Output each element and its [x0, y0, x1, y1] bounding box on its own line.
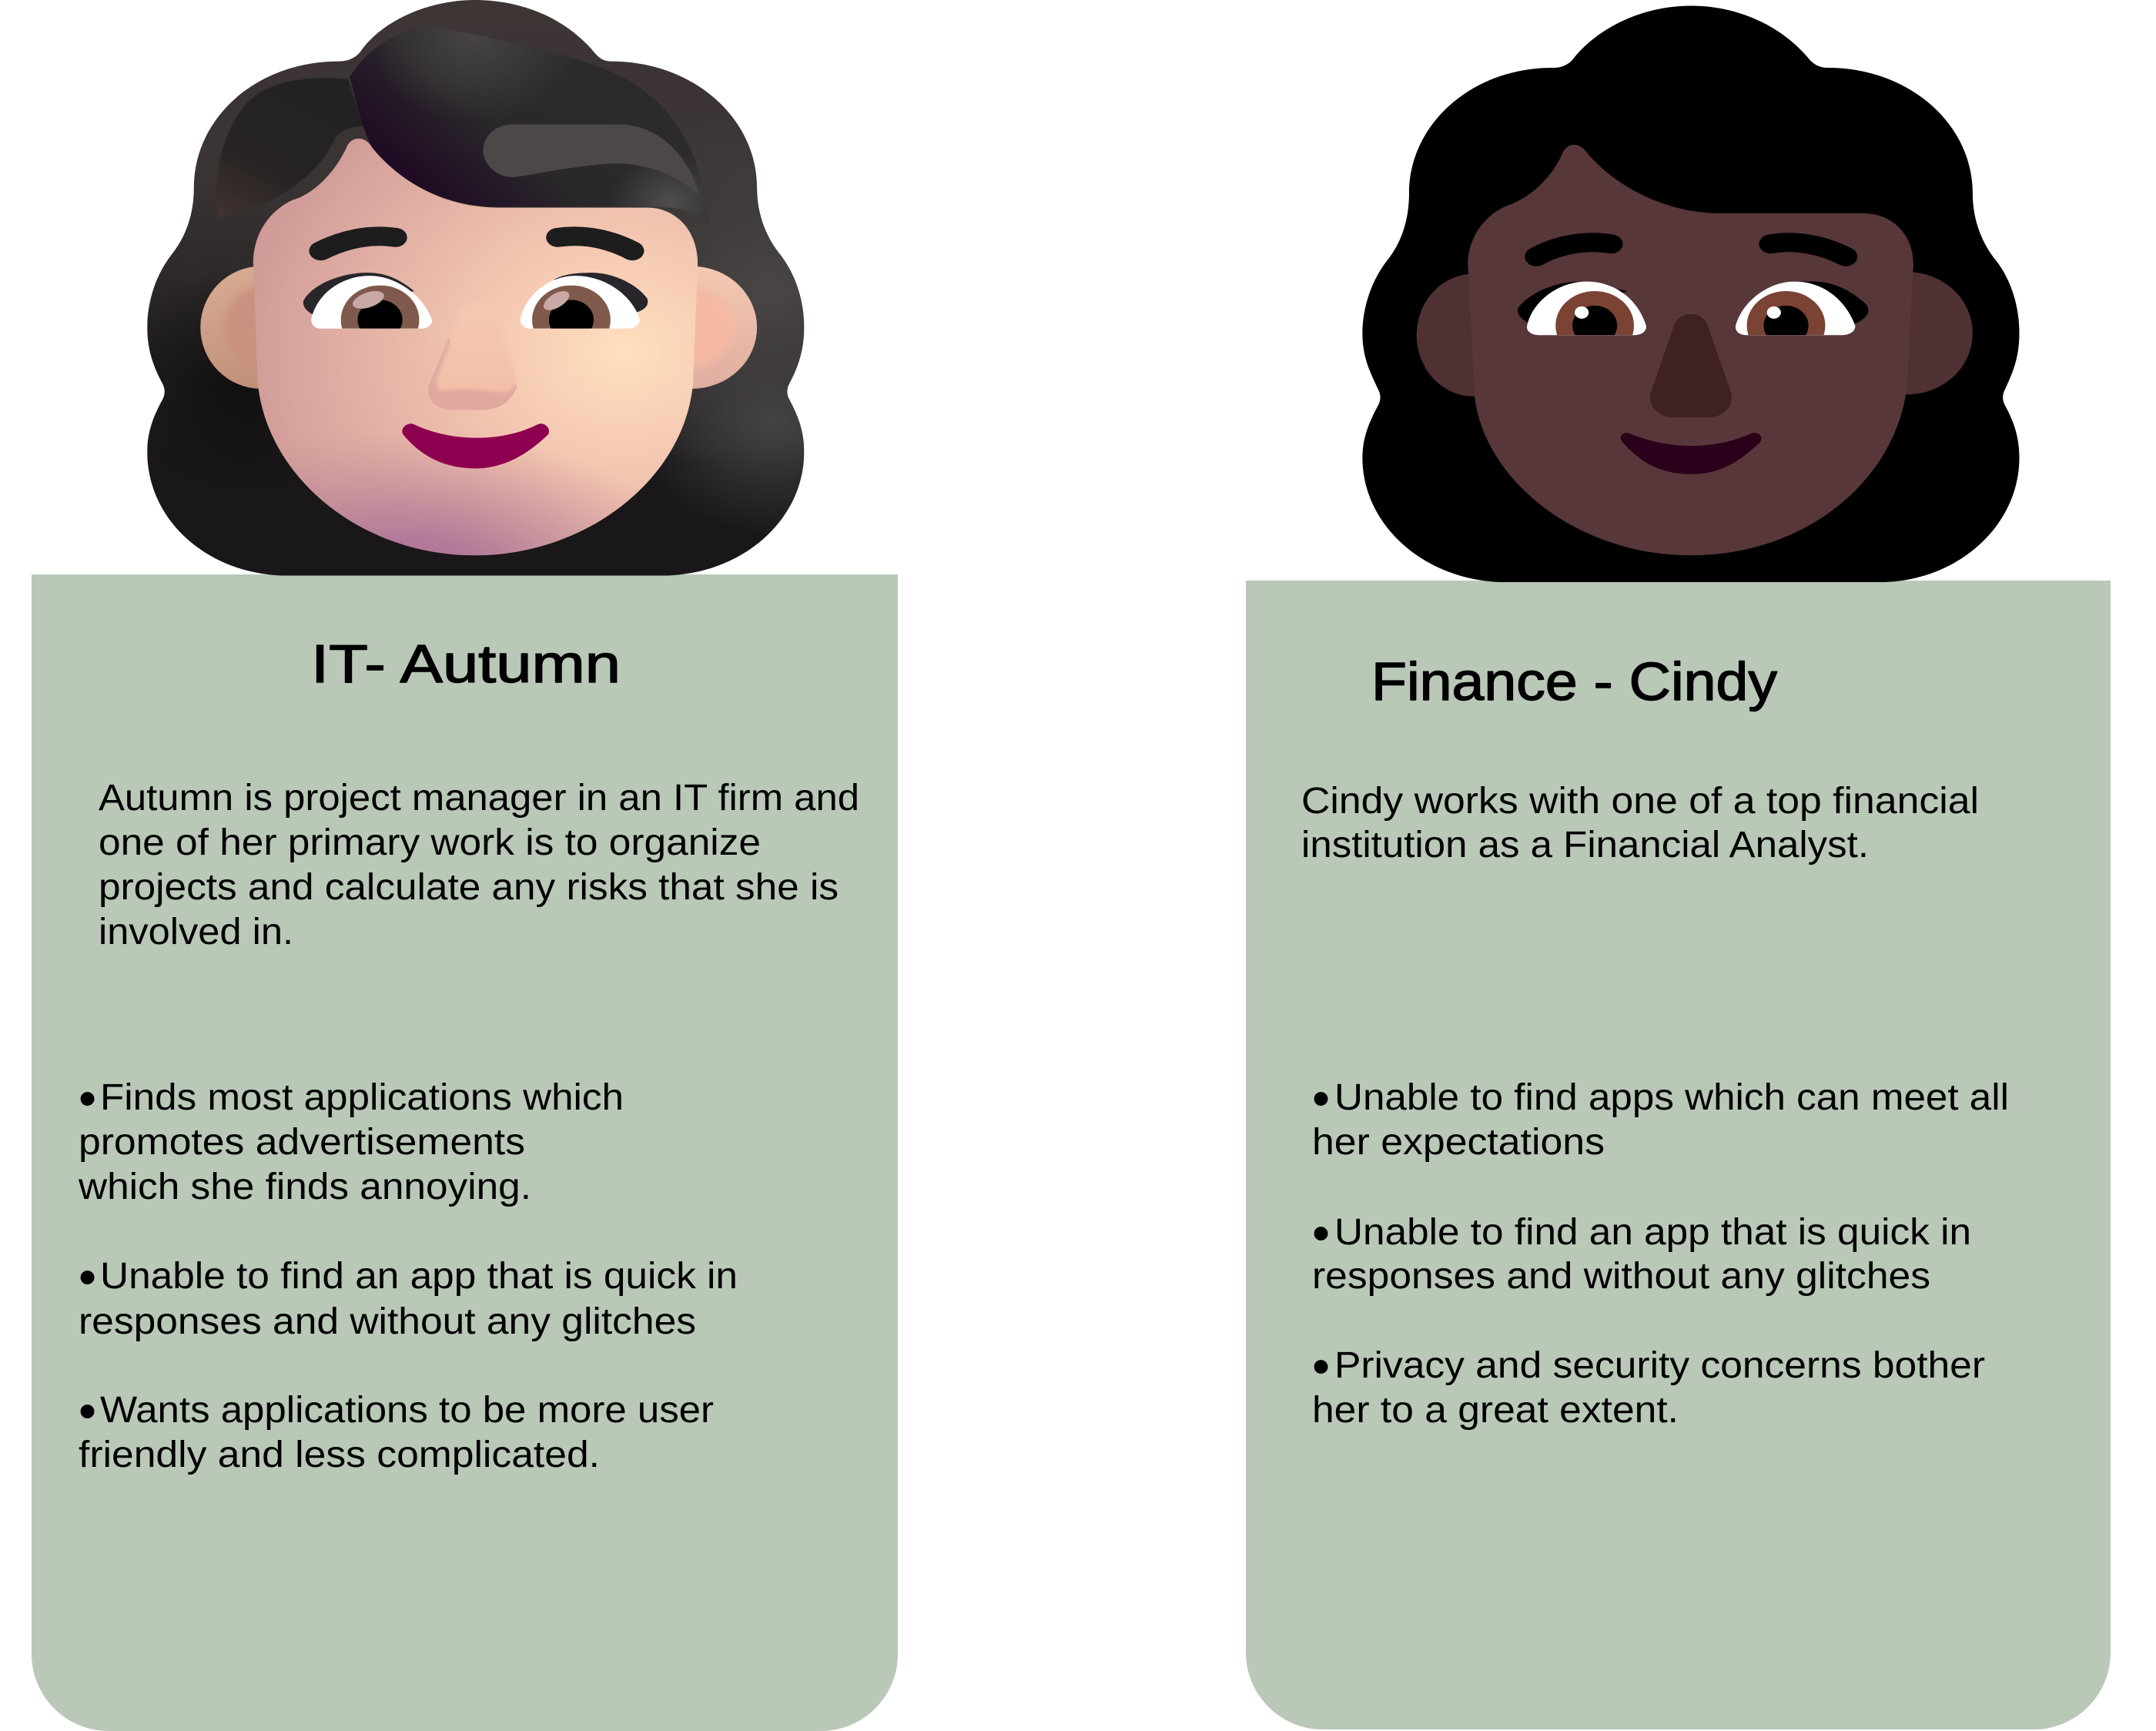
text: Autumn pain points: Unable to find an app that is quick in — [100, 1256, 738, 1297]
text: Autumn pain points: • — [79, 1248, 96, 1305]
eyebrows — [1536, 243, 1846, 256]
text: Cindy pain points: her to a great extent. — [1312, 1390, 1679, 1431]
heading: IT- Autumn: IT- Autumn — [311, 634, 621, 694]
ears — [1417, 272, 1973, 397]
text: Autumn pain points — [78, 1070, 738, 1475]
nose — [1650, 314, 1732, 417]
hair front lock — [350, 29, 708, 225]
heading: Finance - Cindy: Finance - Cindy — [1371, 651, 1777, 711]
ears — [200, 266, 757, 389]
text: Autumn pain points: which she finds annoying. — [78, 1167, 531, 1207]
mouth — [1621, 433, 1761, 474]
left eye — [303, 273, 432, 329]
text: Cindy pain points: Unable to find apps which can meet all — [1334, 1077, 2009, 1118]
hair — [1362, 5, 2019, 582]
text: Cindy pain points: Unable to find an app that is quick in — [1334, 1212, 1971, 1253]
text: Cindy pain points: • — [1312, 1338, 1330, 1395]
mouth — [402, 424, 549, 468]
text: Cindy description — [1301, 781, 1979, 866]
text: Cindy pain points: responses and without any glitches — [1312, 1256, 1930, 1297]
text: Cindy pain points — [1312, 1070, 2009, 1431]
right eye — [1736, 282, 1868, 336]
right eye — [521, 273, 648, 329]
left eye — [1517, 282, 1646, 336]
text: Autumn description: one of her primary work is to organize — [99, 822, 761, 863]
text: Autumn pain points: • — [79, 1382, 96, 1439]
text: Autumn pain points: Finds most applications which — [100, 1077, 624, 1118]
text: Autumn pain points: responses and without any glitches — [79, 1301, 696, 1342]
text: Autumn pain points: promotes advertisements — [79, 1122, 525, 1163]
text: Autumn pain points: • — [79, 1070, 96, 1127]
panel: Cindy card background — [1246, 581, 2111, 1729]
hair left lock — [216, 78, 365, 219]
text: Autumn pain points: Wants applications to be more user — [100, 1390, 714, 1431]
text: Cindy pain points: • — [1312, 1070, 1330, 1127]
eyebrows — [321, 236, 632, 251]
text: Autumn pain points: friendly and less complicated. — [79, 1435, 600, 1475]
face — [1468, 145, 1913, 555]
text: Autumn description: involved in. — [99, 912, 293, 953]
text: Cindy pain points: Privacy and security concerns bother — [1334, 1345, 1985, 1386]
icon: Cindy avatar — [1362, 5, 2019, 582]
nose — [428, 303, 517, 410]
hair highlight — [483, 125, 698, 196]
text: Autumn description — [99, 778, 859, 953]
text: Autumn description: Autumn is project manager in an IT firm and — [99, 778, 859, 819]
hair back — [147, 0, 804, 576]
text: Cindy description: Cindy works with one of a top financial — [1301, 781, 1979, 822]
text: Autumn description: projects and calculate any risks that she is — [99, 867, 839, 908]
panel: Autumn card background — [32, 574, 898, 1731]
face — [246, 134, 703, 559]
text: Cindy pain points: her expectations — [1312, 1122, 1605, 1163]
icon: Autumn avatar — [147, 0, 804, 576]
text: Cindy pain points: • — [1312, 1204, 1330, 1261]
text: Cindy description: institution as a Financial Analyst. — [1301, 825, 1869, 866]
